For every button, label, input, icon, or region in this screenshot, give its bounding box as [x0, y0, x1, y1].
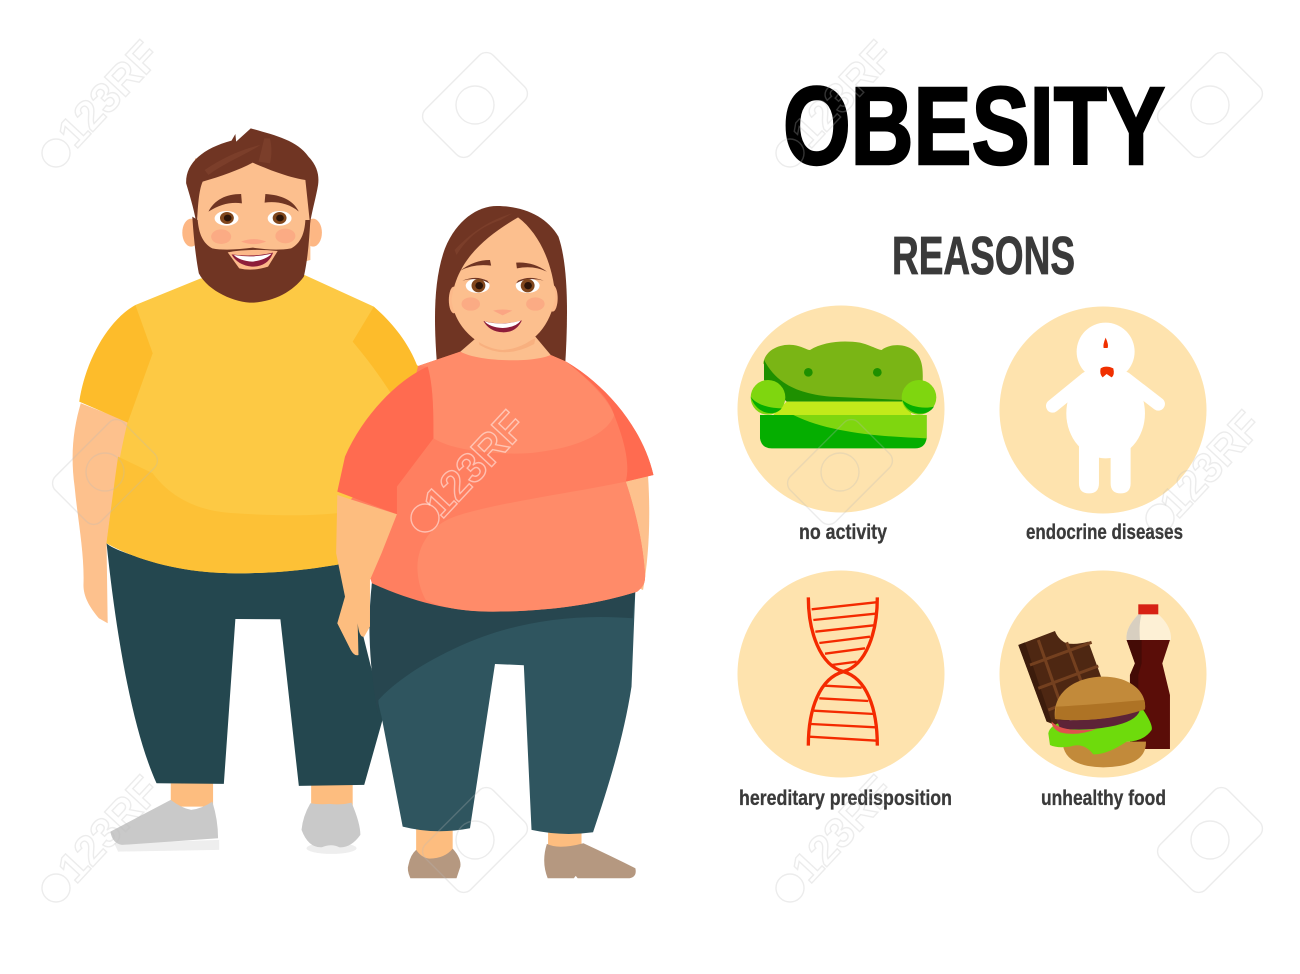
circle background: [738, 570, 944, 778]
watermark layer: 123RF: [48, 32, 169, 156]
circle background: [1000, 570, 1206, 778]
circle background: [738, 306, 944, 512]
panel: unhealthy food: [1000, 570, 1206, 810]
icon: body silhouette with glands: [1053, 323, 1158, 493]
woman figure: [336, 206, 653, 878]
man shirt: [79, 275, 439, 573]
subheading: reasons: REASONS: [892, 226, 1075, 286]
soda bottle: [1126, 604, 1171, 749]
woman shirt: [337, 352, 653, 612]
label: unhealthy food: unhealthy food: [1041, 787, 1166, 810]
panel: endocrine diseases: [1000, 306, 1206, 544]
man figure: [73, 128, 439, 854]
woman right arm: [624, 476, 649, 590]
watermark layer: 123RF: [414, 402, 535, 526]
watermark layer: 123RF: [782, 32, 903, 156]
icon: DNA helix: [808, 597, 877, 746]
man head: [182, 128, 322, 303]
panel: no activity: [738, 306, 944, 544]
woman head: [449, 213, 558, 360]
burger: [1048, 677, 1152, 767]
icon: chocolate, burger and soda: [1018, 604, 1171, 767]
watermark layer: 123RF: [48, 767, 169, 891]
chocolate bar: [1018, 631, 1102, 728]
panel: hereditary predisposition: [738, 570, 952, 810]
icon: green sofa: [751, 341, 936, 448]
label: no activity: no activity: [799, 521, 887, 544]
label: hereditary predisposition: hereditary predisposition: [739, 787, 952, 810]
label: endocrine diseases: endocrine diseases: [1026, 521, 1183, 544]
watermark layer: 123RF: [782, 767, 903, 891]
woman hair back: [435, 206, 567, 368]
illustration: couple: [73, 128, 653, 878]
woman left arm: [336, 495, 397, 655]
man legs and feet: [107, 543, 383, 854]
circle background: [1000, 306, 1206, 514]
man left arm: [73, 403, 128, 623]
title: OBESITY: [783, 65, 1165, 188]
woman legs and feet: [369, 583, 636, 878]
watermark layer: 123RF: [1150, 402, 1271, 526]
